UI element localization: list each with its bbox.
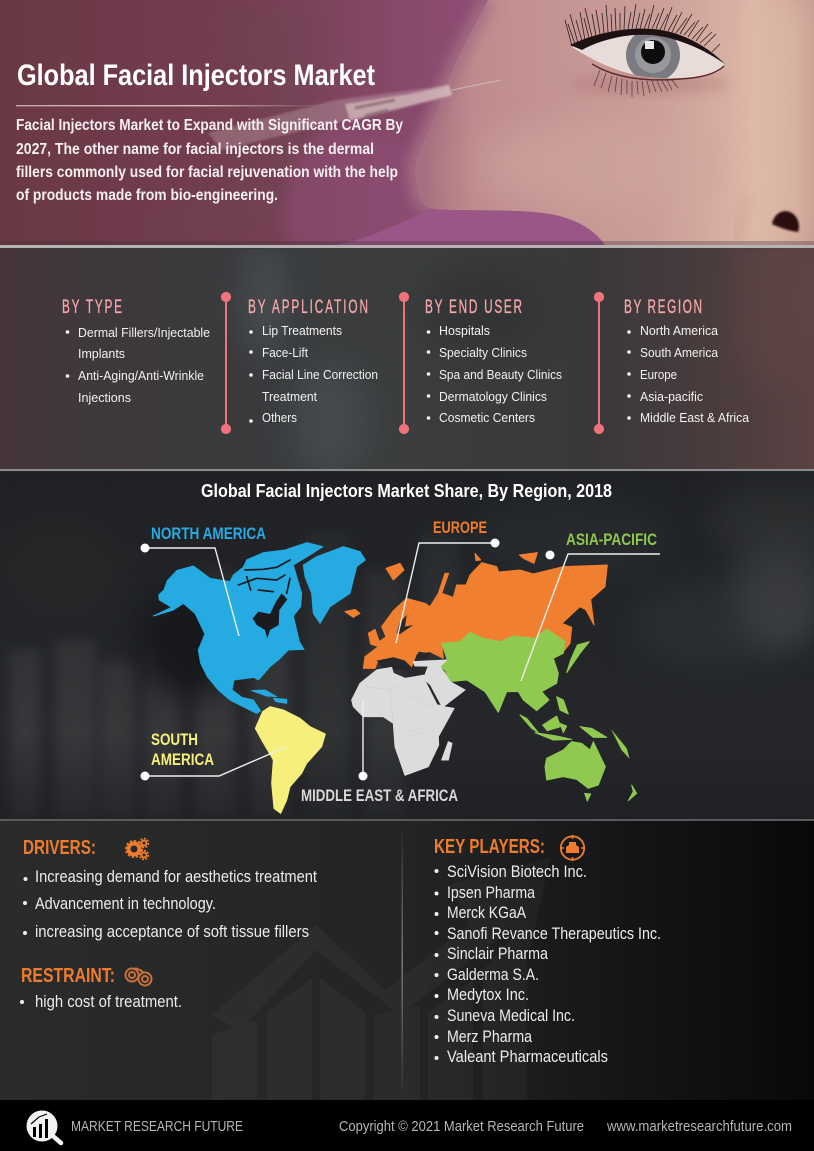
panel: hero banner [0,0,814,250]
icon: syringe [208,80,501,150]
list: key players: Galderma S.A. [447,966,539,984]
heading: key players: KEY PLAYERS: [434,836,545,858]
panel: drivers restraints and key players [0,821,814,1100]
list: key players: Suneva Medical Inc. [447,1007,575,1025]
heading: drivers: DRIVERS: [23,837,96,859]
text block: intro [16,117,403,204]
column: by region: Europe [640,367,677,382]
icon: gears [126,838,148,860]
callout: middle east and africa [301,701,458,805]
divider: segment rules [221,292,604,434]
icon: eye with lashes [565,4,725,97]
column: by type: Injections [78,390,131,405]
map: canadian channels and hudson bay [238,560,290,638]
column: by region [624,297,750,425]
callout: south america [140,730,286,780]
list: key players: Sinclair Pharma [447,945,549,963]
column: by region: South America [640,345,719,360]
callout: south america: AMERICA [151,750,214,769]
list: key players [434,863,661,1066]
callout: asia-pacific: ASIA-PACIFIC [566,530,657,549]
column: by end user: Spa and Beauty Clinics [439,367,562,382]
list: drivers: Advancement in technology. [35,895,216,913]
callout: north america [140,524,266,636]
icon: nose nostril [770,210,800,234]
column: by application [248,297,378,425]
map: dark inland seas [377,615,430,669]
column: by region: BY REGION [624,297,702,318]
column: by application: Facial Line Correction [262,367,378,382]
column: by application: Others [262,410,297,425]
list: restraint: high cost of treatment. [35,993,182,1011]
map: asia-pacific [440,629,637,801]
text: company name: MARKET RESEARCH FUTURE [71,1119,243,1135]
callout: europe [396,518,500,643]
title: Global Facial Injectors Market [17,59,375,92]
column: by type: Implants [78,346,125,361]
column: by end user: Cosmetic Centers [439,410,535,425]
text: website: www.marketresearchfuture.com [606,1119,792,1135]
column: by end user: Dermatology Clinics [439,389,547,404]
list: key players: Medytox Inc. [447,986,529,1004]
list: key players: SciVision Biotech Inc. [447,863,587,881]
column: by region: North America [640,323,719,338]
list: key players: Valeant Pharmaceuticals [447,1048,608,1066]
text block: intro: 2027, The other name for facial injectors is the dermal [16,141,374,158]
panel: footer [0,1100,814,1151]
list: drivers: Increasing demand for aesthetics treatment [35,868,317,886]
callout: middle east and africa: MIDDLE EAST & AFRICA [301,786,458,805]
icon: company logo [26,1110,61,1143]
column: by application: Face-Lift [262,345,308,360]
map: north america [153,543,365,713]
column: by application: Lip Treatments [262,323,342,338]
map: middle east and africa [352,660,465,775]
chart title: Global Facial Injectors Market Share, By Region, 2018 [201,481,612,501]
watermark: growth chart [212,858,550,1100]
panel: regional map [0,471,814,821]
list: drivers: increasing acceptance of soft tissue fillers [35,923,309,941]
map: europe and russia [345,553,607,668]
column: by end user: Specialty Clinics [439,345,527,360]
list: drivers [23,868,317,941]
text block: intro: of products made from bio-engineering. [16,187,278,204]
column: by region: Asia-pacific [640,389,703,404]
icon: handcuffs [126,968,152,986]
column: by application: Treatment [262,389,317,404]
list: key players: Merck KGaA [447,904,526,922]
column: by end user [425,297,562,425]
list: key players: Ipsen Pharma [447,884,536,902]
callout: north america: NORTH AMERICA [151,524,266,543]
list: key players: Sanofi Revance Therapeutics Inc. [447,925,661,943]
callout: asia-pacific [521,530,660,681]
column: by type: Anti-Aging/Anti-Wrinkle [78,368,204,383]
callout: europe: EUROPE [433,518,487,537]
panel: market segments [0,248,814,471]
text block: intro: fillers commonly used for facial rejuvenation with the help [16,164,398,181]
column: by end user: Hospitals [439,323,490,338]
text block: intro: Facial Injectors Market to Expand with Significant CAGR By [16,117,403,134]
column: by type [62,297,210,405]
callout: south america: SOUTH [151,730,198,749]
column: by end user: BY END USER [425,297,522,318]
column: by type: Dermal Fillers/Injectable [78,325,210,340]
icon: target with group [560,835,585,861]
column: by type: BY TYPE [62,297,122,318]
list: key players: Merz Pharma [447,1028,533,1046]
text: copyright: Copyright © 2021 Market Research Future [339,1119,584,1135]
heading: restraint: RESTRAINT: [21,965,115,987]
column: by region: Middle East & Africa [640,410,750,425]
map: south america [255,707,325,813]
icon: pink glove [320,209,606,246]
column: by application: BY APPLICATION [248,297,368,318]
